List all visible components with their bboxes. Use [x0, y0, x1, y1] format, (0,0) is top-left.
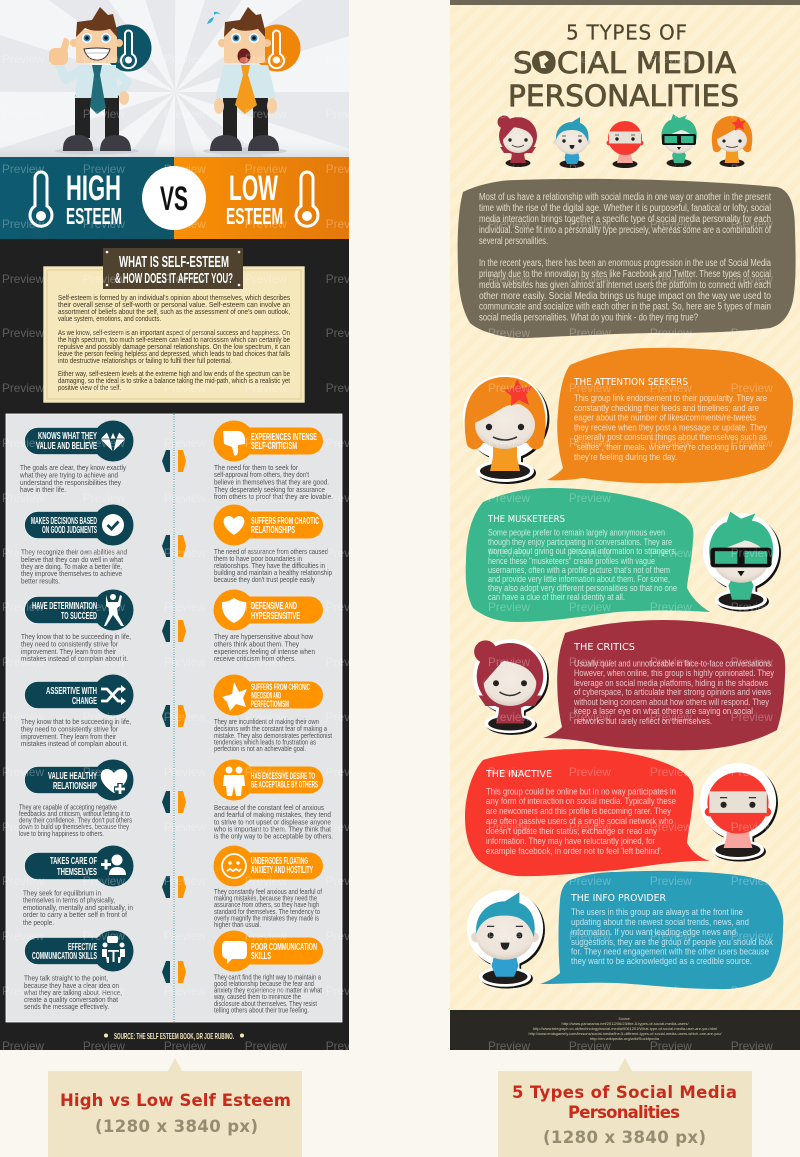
- row 7 low: poor communication: telling others about their true feeling.: [214, 1006, 309, 1014]
- paragraph text: leave the person feeling helpless and depressed, which leads to bad choices that falls: [58, 351, 290, 358]
- watermark: right panel: Preview Preview Preview Preview: [488, 710, 773, 724]
- row 1 high: knows what they value: [19, 420, 133, 494]
- card: the attention seekers: eager about the number of likes/comments/re-tweets: [574, 412, 757, 422]
- watermark: left panel: Preview Preview Preview Preview Preview: [2, 162, 368, 176]
- icon: shield: [222, 598, 246, 623]
- card: the info provider: suggestions, they are the group of people you should look: [571, 937, 774, 947]
- card: the info provider: [467, 871, 783, 989]
- row 6 high: takes care of themselves: themselves in terms of physically,: [23, 896, 115, 904]
- caption: social media personalities: [498, 1058, 752, 1157]
- intro text: several personalities.: [479, 236, 548, 247]
- row 7 high: communication skills: COMMUNICATION SKILLS: [32, 950, 97, 962]
- card: the musketeers: THE MUSKETEERS: [487, 514, 565, 525]
- paragraph text: Self-esteem is formed by an individual's opinion about themselves, which describes: [58, 295, 290, 302]
- heading: low esteem: ESTEEM: [226, 203, 283, 229]
- heading: low esteem: [226, 169, 283, 229]
- row 6 high: takes care of themselves: the people.: [23, 918, 54, 927]
- card: the musketeers: [466, 488, 781, 622]
- card: the musketeers: hence these "musketeers" create profiles with vague: [488, 556, 655, 566]
- icon: broken star: [222, 682, 247, 711]
- watermark: right panel: Preview Preview Preview Preview: [488, 381, 773, 395]
- watermark: right panel: Preview Preview Preview Preview: [488, 217, 773, 231]
- card: the critics: leverage on social media platforms, hiding in the shadows: [574, 678, 769, 688]
- watermark: left panel: Preview Preview Preview Preview Preview: [2, 52, 368, 66]
- footer: sources: http://www.endsgamely.com/lessons/social-media/the-5-different-types-of-social-media-users-which-one-are-you/: [528, 1032, 722, 1036]
- icon: heart plus: [101, 769, 127, 795]
- panel: what is self-esteem note: [43, 266, 305, 403]
- row 4 low: chronic indecision: decisions with the constant fear of making a: [214, 724, 327, 733]
- row 1 high: knows what they value: understand the responsibilities they: [20, 478, 121, 487]
- watermark: right panel: [488, 52, 773, 1053]
- row 4 low: chronic indecision: SUFFERS FROM CHRONIC: [251, 682, 310, 692]
- row 6 high: takes care of themselves: TAKES CARE OF: [50, 855, 97, 867]
- card: the critics: without being concern about how others will respond. They: [573, 697, 770, 707]
- icon: thumbs down: [223, 431, 245, 456]
- speech bubble: [465, 749, 710, 876]
- row 2 high: makes decisions: they are doing. To make a better life,: [21, 562, 122, 571]
- sunburst hero background: [0, 0, 349, 157]
- card: the info provider: they want to be acknowledged as a credible source.: [571, 956, 752, 966]
- sign heading: what is self-esteem: WHAT IS SELF-ESTEEM: [119, 254, 229, 271]
- row 2 high: makes decisions: ON GOOD JUDGMENTS: [42, 524, 97, 536]
- vs badge: [142, 166, 206, 230]
- row 1 high: knows what they value: what they are trying to achieve and: [19, 470, 118, 480]
- paragraph text: value system, emotions, and conducts.: [58, 316, 161, 323]
- caption: high vs low: [48, 1058, 302, 1157]
- row 1 low: intense self-criticism: self-approval from others, they don't: [214, 470, 309, 479]
- row 4 low: chronic indecision: INDECISION AND: [251, 690, 281, 700]
- row 3 high: determination: [21, 590, 134, 663]
- watermark: right panel: Preview Preview Preview Preview: [488, 52, 773, 66]
- paragraph text: their overall sense of self-worth or personal value. Self-esteem can involve an: [58, 302, 290, 309]
- row 6 low: floating anxiety: standard for themselves. The tendency to: [214, 907, 320, 916]
- icon: worried face: [222, 854, 246, 878]
- sign heading: what is self-esteem: [103, 248, 243, 289]
- row 3 high: determination: HAVE DETERMINATION: [32, 600, 97, 612]
- card: the musketeers: and provide very little information about them. For some,: [488, 574, 670, 584]
- character: high esteem man: [49, 7, 152, 154]
- footer: sources: [450, 1010, 800, 1050]
- row 7 high: communication skills: EFFECTIVE: [68, 941, 97, 953]
- card: the attention seekers: constantly checking their feeds and timelines; and are: [574, 403, 759, 413]
- row 6 low: floating anxiety: higher than usual.: [214, 920, 261, 929]
- watermark: right panel: Preview Preview Preview Preview: [488, 107, 773, 121]
- icon: thermometer low: [296, 172, 318, 226]
- row 6 high: takes care of themselves: order to carry a better self in front of: [23, 910, 127, 919]
- row 4 high: assertive: [21, 674, 134, 748]
- row 5 low: excessive desire: Because of the constant feel of anxious: [214, 803, 324, 812]
- row 4 low: chronic indecision: They are incunfident of making their own: [214, 717, 319, 726]
- row 3 low: defensive: They are hypersensitive about how: [214, 632, 314, 641]
- watermark: right panel: Preview Preview Preview Preview: [488, 491, 773, 505]
- watermark: left panel: Preview Preview Preview Preview Preview: [2, 820, 368, 834]
- row 5 low: excessive desire: to strive to not upset or displease anyone: [214, 818, 331, 826]
- watermark: left panel: Preview Preview Preview Preview Preview: [2, 436, 368, 450]
- row 5 high: value healthy relationship: feedbacks and criticism, without letting it to: [19, 809, 130, 818]
- speech bubble: [543, 620, 785, 750]
- card: the critics: THE CRITICS: [573, 642, 635, 653]
- row 5 low: excessive desire: and fearful of making mistakes, they tend: [214, 810, 331, 819]
- character: low esteem man: [203, 7, 300, 154]
- footer: sources: Source:: [618, 1017, 630, 1021]
- row 5 low: excessive desire: is the only way to be acceptable by others.: [214, 832, 333, 840]
- card: the attention seekers: [463, 348, 793, 484]
- footer: sources: http://www.telegraph.co.uk/technology/social-media/9061201/What-type-of-social-media-user-are-you.html: [533, 1027, 717, 1031]
- watermark: right panel: Preview Preview Preview Preview: [488, 272, 773, 286]
- watermark: left panel: Preview Preview Preview Preview Preview: [2, 107, 368, 121]
- row 7 high: communication skills: [23, 930, 133, 1011]
- card: the attention seekers: they're feeling during the day.: [574, 452, 677, 462]
- row 7 low: poor communication: [213, 930, 323, 1014]
- row 7 high: communication skills: because they have a clear idea on: [24, 981, 119, 990]
- caption: social media personalities: 5 Types of Social Media: [512, 1083, 737, 1102]
- card: the inactive: example facebook, in order not to feel 'left behind'.: [486, 846, 663, 856]
- row 7 high: communication skills: create a quality conversation that: [24, 995, 118, 1004]
- card: the attention seekers: generally post constant things about themselves such as: [574, 432, 768, 442]
- arrows: center divider tabs: [162, 450, 186, 983]
- card: the inactive: are often passive users of a single social network who: [486, 816, 673, 826]
- watermark: left panel: Preview Preview Preview Preview Preview: [2, 1039, 368, 1053]
- card: the critics: of cyberspace, to articulate their strong opinions and views: [574, 687, 772, 697]
- watermark: right panel: Preview Preview Preview Preview: [488, 929, 773, 943]
- row 2 low: chaotic relationships: building and maintain a healthy relationship: [214, 568, 332, 577]
- heading: high esteem: ESTEEM: [66, 203, 122, 229]
- watermark: left panel: Preview Preview Preview Preview Preview: [2, 381, 368, 395]
- card: the musketeers: can have a clue of their real identity at all.: [488, 592, 625, 602]
- speech bubble: [540, 871, 783, 989]
- row 4 low: chronic indecision: mistake. They also demonstrates perfectionist: [214, 731, 332, 740]
- icon: person plus: [101, 854, 126, 875]
- watermark: left panel: Preview Preview Preview Preview Preview: [2, 765, 368, 779]
- row 2 low: chaotic relationships: RELATIONSHIPS: [251, 524, 295, 536]
- icon: flexing man: [104, 594, 124, 626]
- row 6 high: takes care of themselves: They seek for equilibrium in: [23, 888, 101, 898]
- row 4 high: assertive: CHANGE: [72, 695, 97, 707]
- speech bubble: [547, 348, 793, 483]
- icon: thermometer high: [30, 172, 52, 226]
- card: the attention seekers: THE ATTENTION SEEKERS: [573, 377, 688, 388]
- row 6 high: takes care of themselves: [23, 846, 134, 927]
- card: the musketeers: they also adopt very different personalities so that no one: [488, 583, 677, 593]
- watermark: left panel: Preview Preview Preview Preview Preview: [2, 710, 368, 724]
- character: orange girl: [463, 375, 549, 484]
- card: the inactive: THE INACTIVE: [485, 769, 552, 780]
- row 1 high: knows what they value: The goals are clear, they know exactly: [20, 463, 126, 472]
- watermark: left panel: Preview Preview Preview Preview Preview: [2, 272, 368, 286]
- row 4 high: assertive: They know that to be succeeding in life,: [21, 717, 131, 726]
- watermark: left panel: Preview Preview Preview Preview Preview: [2, 600, 368, 614]
- watermark: right panel: Preview Preview Preview Preview: [488, 546, 773, 560]
- paragraph text: assortment of beliefs about the self, such as the assessment of one's own outlook,: [58, 309, 290, 316]
- row 7 low: poor communication: anxiety they experience no matter in what: [214, 986, 322, 994]
- speech bubble: [466, 488, 710, 622]
- row 2 low: chaotic relationships: them to have poor boundaries in: [214, 554, 302, 563]
- card: the attention seekers: "selfies", their meals, where they're checking in or what: [574, 442, 765, 452]
- watermark: left panel: Preview Preview Preview Preview Preview: [2, 874, 368, 888]
- icon: scribbled heart: [224, 516, 244, 535]
- heading: low esteem: LOW: [229, 169, 278, 208]
- intro text: [479, 192, 771, 324]
- row 6 high: takes care of themselves: THEMSELVES: [57, 866, 97, 878]
- heading: high esteem: HIGH: [66, 169, 121, 208]
- watermark: right panel: Preview Preview Preview Preview: [488, 765, 773, 779]
- paragraph text: positive view of the self.: [58, 385, 121, 392]
- intro panel: [458, 179, 796, 338]
- row 4 high: assertive: ASSERTIVE WITH: [46, 685, 97, 697]
- row 1 low: intense self-criticism: They desperately seeking for assurance: [214, 485, 325, 494]
- row 2 low: chaotic relationships: [214, 504, 332, 584]
- row 6 low: floating anxiety: UNDERGOES FLOATING: [251, 855, 308, 867]
- paragraph text: [58, 295, 290, 392]
- footer: sources: http://www.panarama.net/2012/06/23/the-5-types-of-social-media-users/: [562, 1022, 689, 1026]
- paragraph text: Either way, self-esteem levels at the extreme high and low ends of the spectrum can be: [58, 371, 290, 378]
- card: the attention seekers: This group link endorsement to their popularity. They are: [574, 393, 767, 403]
- watermark: left panel: Preview Preview Preview Preview Preview: [2, 491, 368, 505]
- row 5 high: value healthy relationship: deny their confidence. They don't put others: [19, 816, 132, 824]
- card: the inactive: are newcomers and this profile is becoming rarer. They: [486, 806, 672, 816]
- icon: globe: [532, 51, 554, 73]
- card: the musketeers: though they enjoy participating in conversations. They are: [488, 537, 672, 547]
- icon: speech bubble: [222, 941, 247, 964]
- row 3 high: determination: They know that to be succeeding in life,: [21, 632, 131, 641]
- icon: check mark: [102, 514, 124, 536]
- watermark: right panel: Preview Preview Preview Preview: [488, 436, 773, 450]
- banner: high vs low: [0, 157, 349, 239]
- row 2 high: makes decisions: better results.: [21, 576, 60, 586]
- character: red headband: [700, 763, 778, 862]
- paragraph text: damaging, so the ideal is to strike a balance taking the mid-path, which is a realistic yet: [58, 378, 290, 385]
- title: 5 TYPES OF: [566, 20, 687, 44]
- sign heading: what is self-esteem: & HOW DOES IT AFFECT YOU?: [115, 270, 233, 287]
- row 3 high: determination: TO SUCCEED: [61, 610, 97, 622]
- paragraph text: the high spectrum, too much self-esteem can lead to narcissism which can certainly be: [58, 337, 290, 344]
- row 1 high: knows what they value: have in their life.: [20, 485, 66, 494]
- row 6 low: floating anxiety: assurance from others, so they have high: [214, 900, 319, 909]
- row 3 low: defensive: HYPERSENSITIVE: [251, 610, 300, 622]
- card: the critics: networks but rarely reflect on themselves.: [574, 716, 712, 726]
- panel: comparison columns: [6, 414, 342, 1022]
- row 7 high: communication skills: what they are talking about. Hence,: [23, 988, 122, 997]
- row 5 high: value healthy relationship: down to build up themselves, because they: [19, 822, 129, 831]
- footer: sources: http://en.wikipedia.org/wiki/Sockfpedia: [590, 1037, 660, 1041]
- row 3 low: defensive: experiences feeling of intense when: [214, 647, 315, 656]
- row 4 high: assertive: improvement. They learn from their: [21, 732, 117, 741]
- row 5 high: value healthy relationship: RELATIONSHIP: [53, 780, 97, 792]
- icon: two people: [223, 766, 245, 796]
- top edge bar: [450, 0, 800, 5]
- row 3 high: determination: mistakes instead of complain about it.: [21, 654, 128, 663]
- row 4 low: chronic indecision: tendencies which leads to frustration as: [214, 738, 316, 746]
- card: the musketeers: Some people prefer to remain largely anonymous even: [488, 528, 665, 538]
- card: the critics: keep a laser eye on what others are saying on social: [574, 706, 753, 716]
- card: the attention seekers: they receive when they post a message or update. They: [574, 422, 768, 432]
- row 4 high: assertive: mistakes instead of complain about it.: [21, 739, 128, 748]
- card: the musketeers: usernames, often with a profile picture that's not of them: [488, 565, 670, 575]
- row 5 high: value healthy relationship: VALUE HEALTHY: [48, 770, 97, 782]
- source line: SOURCE: THE SELF ESTEEM BOOK, DR JOE RUBINO.: [114, 1031, 234, 1041]
- icon: diamond: [100, 432, 126, 452]
- row 6 low: floating anxiety: They constantly feel anxious and fearful of: [214, 887, 322, 896]
- row 7 low: poor communication: good relationship because the fear and: [214, 979, 314, 988]
- card: the inactive: any form of interaction on social media. Typically these: [486, 796, 676, 806]
- character: blue boy: [467, 890, 545, 988]
- row 3 low: defensive: DEFENSIVE AND: [251, 600, 297, 612]
- row 1 high: knows what they value: VALUE AND BELIEVE: [36, 440, 97, 452]
- card: the inactive: [465, 749, 778, 876]
- row 2 high: makes decisions: They recognize their own abilities and: [21, 548, 127, 556]
- card: the critics: [473, 620, 785, 750]
- row 1 high: knows what they value: KNOWS WHAT THEY: [38, 430, 97, 442]
- watermark: right panel: Preview Preview Preview Preview: [488, 326, 773, 340]
- card: the musketeers: worried about giving out personal information to strangers,: [487, 546, 677, 556]
- row 2 low: chaotic relationships: SUFFERS FROM CHAOTIC: [251, 515, 319, 527]
- icon: shuffle arrows: [101, 685, 126, 705]
- row 3 low: defensive: [214, 590, 323, 663]
- vs badge: VS: [160, 180, 188, 218]
- source line: [104, 1031, 244, 1041]
- watermark: left panel: Preview Preview Preview Preview Preview: [2, 929, 368, 943]
- card: the info provider: for. They need engagement with the other users because: [571, 946, 769, 956]
- row 3 low: defensive: receive criticism from others.: [214, 654, 296, 663]
- caption: high vs low: High vs Low Self Esteem: [60, 1091, 291, 1110]
- watermark: left panel: [2, 52, 368, 1053]
- panel: social media personalities: [450, 0, 800, 1050]
- title: SOCIAL MEDIA: [513, 46, 736, 80]
- watermark: left panel: Preview Preview Preview Preview Preview: [2, 546, 368, 560]
- watermark: right panel: Preview Preview Preview Preview: [488, 820, 773, 834]
- card: the info provider: updating about the newest social trends, news, and: [571, 917, 749, 927]
- watermark: left panel: Preview Preview Preview Preview Preview: [2, 326, 368, 340]
- dark section background: [0, 239, 349, 1050]
- row 4 high: assertive: they need to consistently strive for: [21, 724, 119, 734]
- watermark: left panel: Preview Preview Preview Preview Preview: [2, 984, 368, 998]
- row 7 low: poor communication: They can't find the right way to maintain a: [214, 972, 321, 982]
- row 3 low: defensive: others think about them. They: [214, 640, 299, 648]
- paragraph text: As we know, self-esteem is an important aspect of personal success and happiness. On: [58, 330, 290, 337]
- card: the info provider: THE INFO PROVIDER: [570, 893, 666, 904]
- heading: high esteem: [66, 169, 122, 229]
- row 4 low: chronic indecision: perfection is not an achievable goal.: [214, 744, 306, 753]
- row 1 low: intense self-criticism: believe in themselves that they are good.: [214, 478, 329, 486]
- card: the info provider: The users in this group are always at the front line: [571, 907, 743, 917]
- row 3 high: determination: improvement. They learn from their: [21, 647, 117, 656]
- row 5 low: excessive desire: [213, 760, 333, 840]
- watermark: right panel: Preview Preview Preview Preview: [488, 984, 773, 998]
- row 5 high: value healthy relationship: love to bring happiness to others.: [19, 829, 104, 838]
- caption: social media personalities: Personalities: [568, 1103, 680, 1122]
- row 6 high: takes care of themselves: emotionally, mentally and spiritually, in: [23, 903, 133, 912]
- striped background: [450, 0, 800, 1010]
- row 1 low: intense self-criticism: [214, 420, 333, 501]
- row 7 low: poor communication: disclosure about themselves. They resist: [214, 999, 317, 1008]
- row 7 high: communication skills: sends the message effectively.: [24, 1002, 109, 1011]
- row 4 low: chronic indecision: [214, 674, 332, 753]
- row 7 low: poor communication: POOR COMMUNICATION: [251, 941, 317, 953]
- character: crimson girl: [473, 639, 549, 735]
- row 1 low: intense self-criticism: SELF-CRITICISM: [251, 440, 297, 452]
- intro text: social media personalities. What do you think - do they ring true?: [479, 312, 698, 324]
- row 5 low: excessive desire: HAS EXCESSIVE DESIRE TO: [251, 771, 315, 781]
- character row: [498, 114, 752, 168]
- row 1 low: intense self-criticism: The need for them to seek for: [214, 463, 299, 472]
- title: PERSONALITIES: [508, 79, 739, 113]
- row 2 high: makes decisions: MAKES DECISIONS BASED: [31, 515, 97, 527]
- row 5 high: value healthy relationship: They are capable of accepting negative: [19, 802, 117, 812]
- caption: high vs low: (1280 x 3840 px): [95, 1117, 258, 1136]
- row 4 low: chronic indecision: PERFECTIONISM: [251, 699, 289, 709]
- row 2 low: chaotic relationships: because they don't trust people easily: [214, 575, 315, 584]
- watermark: right panel: Preview Preview Preview Preview: [488, 655, 773, 669]
- watermark: right panel: Preview Preview Preview Preview: [488, 874, 773, 888]
- row 6 low: floating anxiety: making mistakes, because they need the: [214, 894, 317, 902]
- row 2 high: makes decisions: they improve themselves to achieve: [21, 569, 122, 578]
- row 6 low: floating anxiety: [214, 846, 323, 929]
- paragraph text: repulsive and possibly damage personal relationships. On the low spectrum, it can: [58, 344, 290, 351]
- row 5 high: value healthy relationship: [19, 760, 134, 838]
- row 1 low: intense self-criticism: from others to proof that they are lovable.: [214, 492, 333, 501]
- row 5 low: excessive desire: who is important to them. They think that: [213, 824, 331, 834]
- watermark: left panel: Preview Preview Preview Preview Preview: [2, 217, 368, 231]
- row 7 low: poor communication: way, caused them to minimize the: [213, 992, 301, 1001]
- row 7 low: poor communication: SKILLS: [251, 950, 271, 962]
- row 6 low: floating anxiety: ANXIETY AND HOSTILITY: [251, 864, 313, 876]
- row 5 low: excessive desire: BE ACCEPTABLE BY OTHERS: [251, 780, 318, 790]
- row 2 high: makes decisions: believe that they can do well in what: [21, 555, 123, 564]
- row 6 low: floating anxiety: overly magnify the mistakes they made is: [214, 914, 319, 922]
- panel: high vs low self esteem: [0, 0, 349, 1050]
- card: the inactive: This group could be online but in no way participates in: [486, 786, 676, 796]
- icon: meeting at table: [102, 936, 125, 963]
- row 1 low: intense self-criticism: EXPERIENCES INTENSE: [251, 431, 317, 443]
- row 2 low: chaotic relationships: relationships. They have the difficulties in: [214, 561, 325, 570]
- row 3 high: determination: they need to consistently strive for: [21, 640, 119, 648]
- caption: social media personalities: (1280 x 3840 px): [543, 1128, 706, 1147]
- watermark: right panel: Preview Preview Preview Preview: [488, 1039, 773, 1053]
- card: the inactive: doesn't update their status, exchange or read any: [486, 826, 658, 836]
- card: the inactive: information. They may have reluctantly joined, for: [486, 836, 655, 846]
- row 7 high: communication skills: They talk straight to the point,: [24, 974, 108, 982]
- row 2 low: chaotic relationships: The need of assurance from others caused: [214, 547, 328, 556]
- paragraph text: into destructive relationships or failing to fulfil their full potential.: [58, 358, 232, 365]
- watermark: right panel: Preview Preview Preview Preview: [488, 600, 773, 614]
- card: the info provider: information. If you want leading-edge news and: [571, 927, 736, 937]
- watermark: left panel: Preview Preview Preview Preview Preview: [2, 655, 368, 669]
- title: [508, 20, 739, 113]
- row 2 high: makes decisions: [21, 504, 134, 586]
- character: green boy: [703, 512, 781, 612]
- watermark: right panel: Preview Preview Preview Preview: [488, 162, 773, 176]
